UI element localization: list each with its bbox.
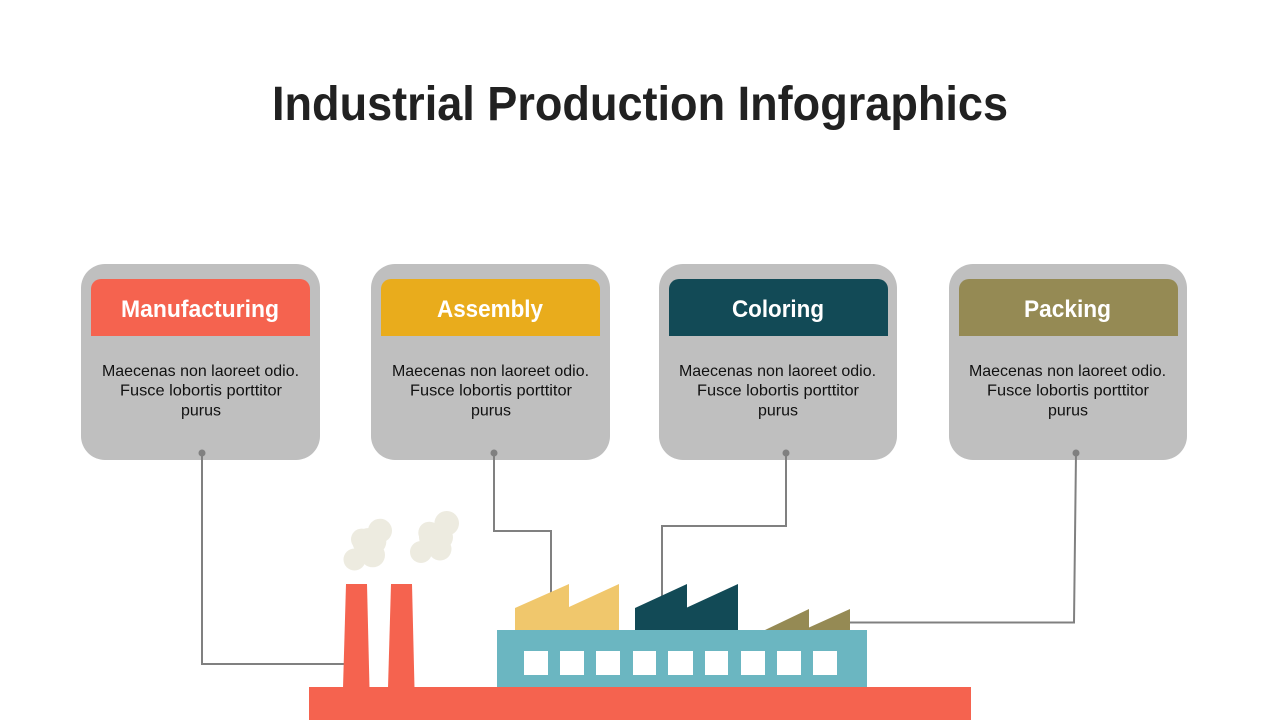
text block: coloring (679, 363, 876, 420)
text block: coloring: Fusce lobortis porttitor (697, 382, 860, 400)
icon: left smoke cloud (344, 519, 392, 570)
heading: assembly (381, 279, 600, 336)
factory base (309, 687, 971, 720)
text block: manufacturing: purus (181, 402, 221, 420)
text block: assembly (392, 363, 589, 420)
text block: manufacturing: Fusce lobortis porttitor (120, 382, 283, 400)
text block: assembly: purus (471, 402, 511, 420)
icon: right chimney (388, 584, 414, 688)
panel: coloring (659, 264, 897, 460)
text block: manufacturing (102, 363, 299, 420)
heading: assembly: Assembly (437, 296, 544, 323)
heading: packing (959, 279, 1178, 336)
text block: packing: Maecenas non laoreet odio. (969, 363, 1166, 380)
text block: packing (969, 363, 1166, 420)
heading: manufacturing (91, 279, 310, 336)
text block: assembly: Maecenas non laoreet odio. (392, 363, 589, 380)
icon: left chimney (343, 584, 370, 688)
panel: packing (949, 264, 1187, 460)
heading: coloring: Coloring (732, 296, 824, 323)
heading: coloring (669, 279, 888, 336)
text block: assembly: Fusce lobortis porttitor (410, 382, 573, 400)
connector: coloring to teal roof (662, 450, 790, 599)
icon: right smoke cloud (410, 511, 459, 563)
text block: packing: purus (1048, 402, 1088, 420)
heading: packing: Packing (1024, 296, 1111, 323)
building with windows (497, 630, 867, 687)
connector: packing to olive roof (850, 450, 1080, 622)
connector: assembly to yellow roof (490, 450, 551, 595)
text block: coloring: purus (758, 402, 798, 420)
connector: manufacturing to chimney (198, 450, 346, 664)
icon: yellow roof (515, 584, 619, 630)
title: Industrial Production Infographics (272, 78, 1008, 131)
icon: olive roof (765, 609, 850, 630)
text block: packing: Fusce lobortis porttitor (987, 382, 1150, 400)
heading: manufacturing: Manufacturing (121, 296, 279, 323)
panel: assembly (371, 264, 610, 460)
text block: coloring: Maecenas non laoreet odio. (679, 363, 876, 380)
text block: manufacturing: Maecenas non laoreet odio. (102, 363, 299, 380)
icon: teal roof (635, 584, 738, 630)
panel: manufacturing (81, 264, 320, 460)
illustration: factory (309, 511, 971, 720)
